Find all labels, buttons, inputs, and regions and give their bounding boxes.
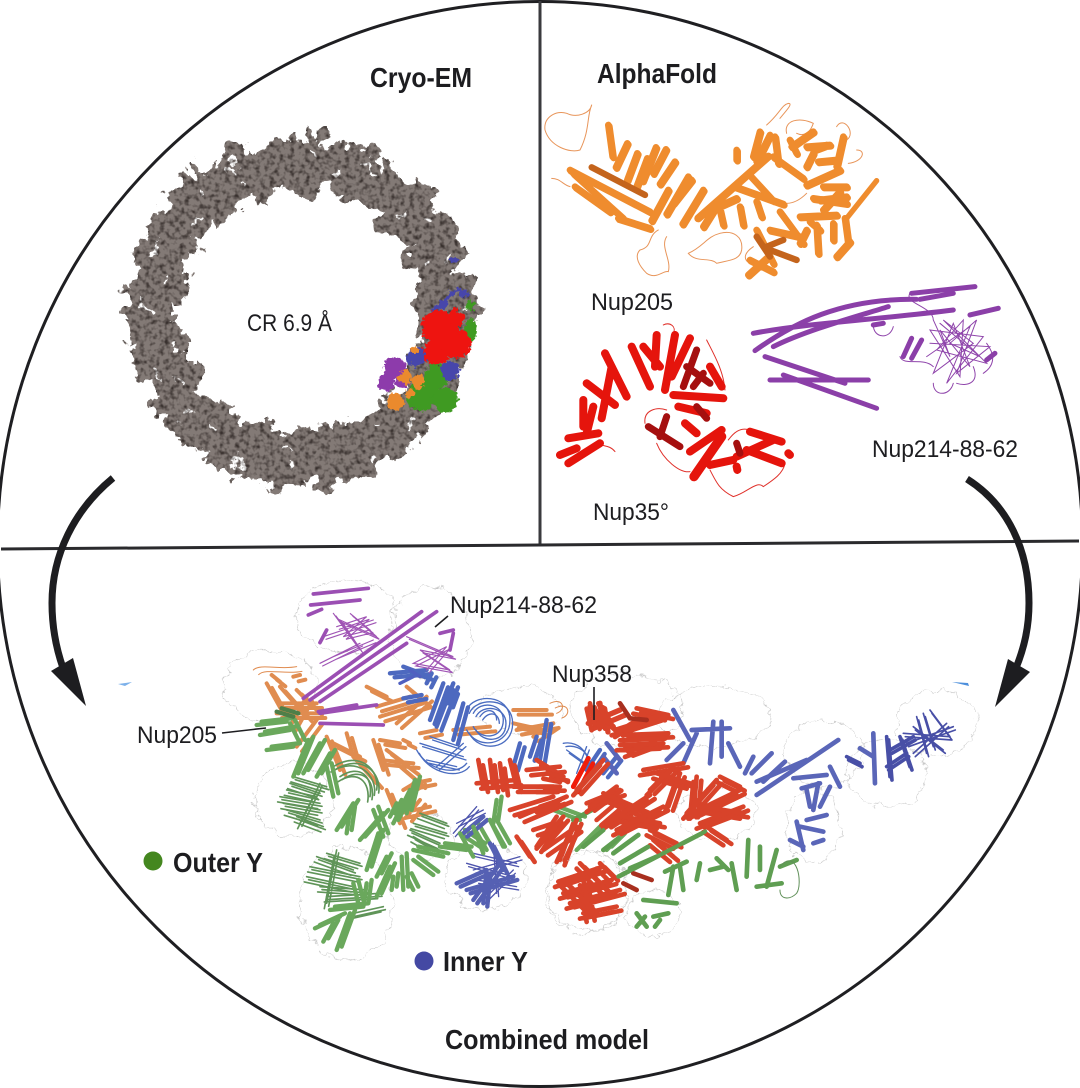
label: Nup35°: Nup35°: [593, 499, 669, 526]
heading: AlphaFold: AlphaFold: [597, 58, 717, 89]
chart: combined molecular model, left part: [223, 580, 627, 960]
protein: Nup214-88-62 purple: [753, 287, 998, 408]
subunit: inner Y blue end: [847, 710, 955, 780]
subunit: inner Y blue tail: [603, 710, 875, 850]
legend: Outer Y: Outer Y: [173, 847, 263, 878]
protein: Nup205 orange: [545, 103, 877, 276]
heading: Cryo-EM: Cryo-EM: [370, 62, 472, 93]
heading: Combined model: Combined model: [445, 1024, 649, 1055]
label: Nup205: Nup205: [591, 289, 673, 316]
leader: Nup214-88-62: [435, 616, 448, 627]
density outlines: [223, 580, 627, 960]
label: Nup214-88-62: Nup214-88-62: [872, 436, 1018, 463]
leader: Nup205: [222, 728, 266, 733]
subunit: green tail overlay: [583, 830, 705, 877]
ring subunits: coloured highlight: [377, 257, 477, 413]
label: Nup214-88-62: Nup214-88-62: [450, 592, 597, 619]
subunit: Nup214-88-62 purple: [303, 588, 456, 725]
label: CR 6.9 Å: CR 6.9 Å: [247, 309, 332, 337]
panel: Combined model: [118, 580, 977, 1055]
panel: AlphaFold: [545, 58, 1018, 526]
horizontal divider: [1, 541, 1079, 549]
chart: combined molecular model, right part: [537, 673, 977, 937]
density outlines: [547, 673, 977, 937]
subunit: outer Y green: [257, 708, 625, 950]
leader: Nup358: [593, 687, 595, 720]
panel: Cryo-EM: [133, 62, 477, 479]
label: Nup358: Nup358: [552, 661, 632, 688]
arrow: left, cryo-EM to combined model: [51, 478, 113, 706]
subunit: outer Y green tail: [573, 808, 799, 927]
protein: Nup35 red: [560, 324, 790, 497]
subunit: red Nup35: [477, 703, 625, 865]
subunit: inner Y blue: [390, 667, 621, 907]
fleck: blue right: [952, 682, 969, 686]
legend: Outer Y: [144, 847, 263, 878]
subunit: orange Nup205: [253, 667, 568, 828]
legend: Inner Y: [414, 946, 528, 977]
vertical divider: [538, 1, 542, 546]
fleck: blue left: [118, 682, 132, 686]
arrow: right, AlphaFold to combined model: [967, 479, 1030, 707]
subunit: red Nup358: [537, 703, 748, 922]
label: Nup205: Nup205: [137, 722, 217, 749]
legend: Inner Y: Inner Y: [443, 946, 528, 977]
chart: cryo-EM density ring: [133, 145, 477, 479]
